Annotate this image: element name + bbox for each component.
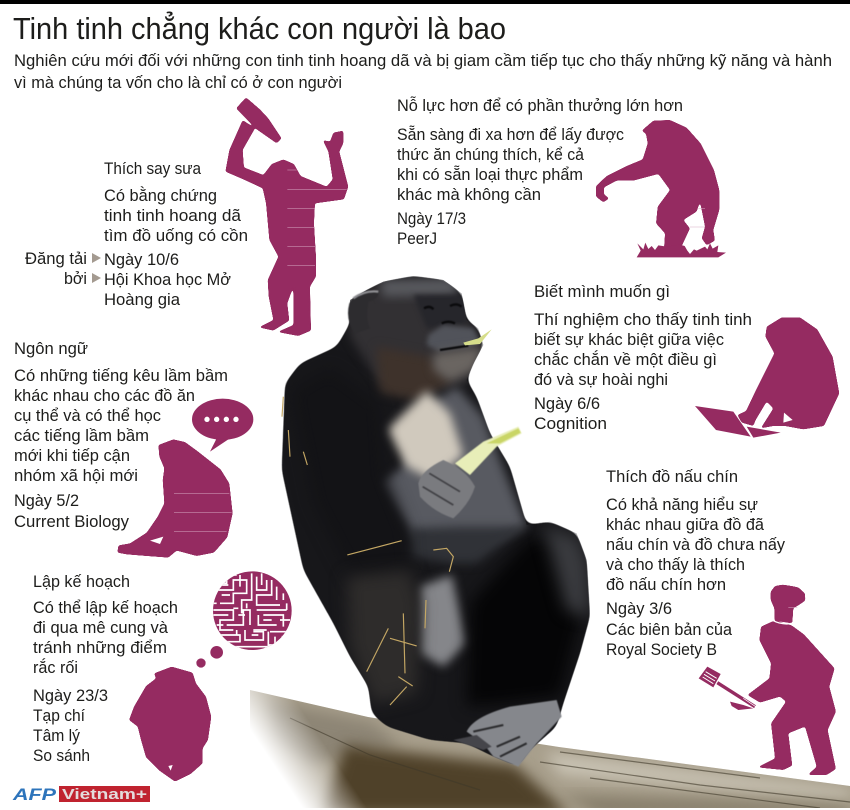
body text: reward effort: khi có sẵn loại thực phẩm [397, 165, 583, 184]
speech bubble [192, 399, 253, 452]
body text: language: nhóm xã hội mới [14, 467, 138, 485]
body text: knowing: Cognition [534, 415, 607, 433]
body text: language [14, 367, 228, 531]
body text: planning: tránh những điểm [33, 639, 167, 657]
icon: chimp thinking of a maze [129, 571, 292, 782]
food in mouth [463, 329, 492, 345]
body text: drinking: Hoàng gia [104, 291, 181, 309]
body text: knowing: Thí nghiệm cho thấy tinh tinh [534, 311, 752, 329]
icon: chef chimp with spatula [699, 585, 836, 775]
body text: drinking: Ngày 10/6 [104, 251, 179, 269]
published by note: Đăng tải [25, 250, 87, 268]
body text: language: Ngày 5/2 [14, 492, 79, 510]
body text: cooked food: Các biên bản của [606, 621, 733, 639]
body text: reward effort [397, 125, 624, 248]
main chimpanzee photo [282, 276, 590, 767]
body text: language: Current Biology [14, 513, 130, 531]
heading: cooked food: Thích đồ nấu chín [606, 468, 738, 486]
ear [348, 291, 379, 333]
body text: cooked food: và cho thấy là thích [606, 556, 745, 574]
body text: language: Có những tiếng kêu lầm bầm [14, 367, 228, 385]
panel: reward effort [397, 96, 726, 257]
body text: cooked food: Royal Society B [606, 641, 717, 659]
heading: knowing: Biết mình muốn gì [534, 283, 670, 301]
body text: cooked food: khác nhau giữa đồ đã [606, 516, 765, 534]
published by note: bởi [64, 270, 87, 288]
wooden log [250, 690, 850, 808]
body text: planning: rắc rối [33, 658, 78, 677]
title: Tinh tinh chẳng khác con người là bao [13, 10, 506, 46]
body text: knowing: biết sự khác biệt giữa việc [534, 331, 724, 349]
chimp silhouette [282, 276, 590, 767]
maze [213, 571, 292, 650]
body text: cooked food: đồ nấu chín hơn [606, 576, 726, 594]
body text: cooked food: Có khả năng hiểu sự [606, 496, 758, 514]
body text: cooked food: nấu chín và đồ chưa nấy [606, 536, 786, 554]
body text: drinking: tìm đồ uống có cồn [104, 227, 248, 245]
food stalk in hand [455, 427, 522, 475]
body text: planning: Ngày 23/3 [33, 687, 108, 705]
body text: knowing: chắc chắn về một điều gì [534, 350, 717, 369]
icon: chimp with bottle [225, 97, 348, 336]
published by note [25, 250, 101, 288]
intro text [14, 51, 832, 92]
log fade [240, 680, 430, 810]
logo: AFP: AFP [12, 785, 57, 804]
body text: language: mới khi tiếp cận [14, 447, 130, 465]
body text: language: cụ thể và có thể học [14, 407, 161, 425]
body text: planning [33, 599, 178, 765]
intro text: vì mà chúng ta vốn cho là chỉ có ở con người [14, 73, 342, 92]
panel: drinking [25, 97, 348, 336]
body text: planning: Tạp chí [33, 707, 85, 725]
body text: knowing: đó và sự hoài nghi [534, 371, 668, 389]
body text: planning: Tâm lý [33, 727, 81, 745]
panel: planning [33, 571, 292, 782]
body text: knowing [534, 311, 752, 433]
body text: drinking [104, 186, 248, 309]
heading: language: Ngôn ngữ [14, 340, 88, 358]
spatula [699, 667, 757, 710]
logo: Vietnam+: Vietnam+ [62, 786, 147, 803]
fur shading [290, 278, 590, 707]
body text: reward effort: thức ăn chúng thích, kể cả [397, 146, 585, 164]
body text: knowing: Ngày 6/6 [534, 395, 600, 413]
hand [418, 460, 475, 518]
icon: reaching chimp on grass [596, 120, 726, 257]
straws [282, 397, 453, 705]
body text: drinking: Có bằng chứng [104, 186, 217, 205]
body text: drinking: Hội Khoa học Mở [104, 271, 231, 289]
body text: planning: Có thể lập kế hoạch [33, 599, 178, 617]
panel: knowing what it wants [534, 283, 839, 438]
body text: planning: So sánh [33, 747, 90, 765]
eyes, nose and mouth [424, 304, 468, 350]
top black bar [0, 0, 850, 4]
heading: reward effort: Nỗ lực hơn để có phần thưởng lớn hơn [397, 96, 683, 115]
body text: reward effort: Sẵn sàng đi xa hơn để lấy được [397, 125, 624, 144]
icon: sitting chimp with speech bubble [117, 399, 253, 558]
body text: cooked food: Ngày 3/6 [606, 600, 672, 618]
body text: cooked food [606, 496, 786, 659]
heading: drinking: Thích say sưa [104, 160, 202, 178]
foot [453, 700, 562, 767]
body text: reward effort: PeerJ [397, 230, 437, 248]
body text: language: khác nhau cho các đồ ăn [14, 387, 195, 405]
panel: cooked food [606, 468, 836, 775]
panel: language [14, 340, 253, 558]
body text: language: các tiếng lầm bầm [14, 427, 149, 445]
body text: reward effort: khác mà không cần [397, 186, 541, 204]
heading: planning: Lập kế hoạch [33, 573, 130, 591]
body text: reward effort: Ngày 17/3 [397, 210, 466, 228]
body text: drinking: tinh tinh hoang dã [104, 207, 242, 225]
body text: planning: đi qua mê cung và [33, 619, 169, 637]
intro text: Nghiên cứu mới đối với những con tinh tinh hoang dã và bị giam cầm tiếp tục cho thấy những kỹ năng và hành [14, 51, 832, 70]
icon: chimp at laptop [695, 317, 839, 438]
